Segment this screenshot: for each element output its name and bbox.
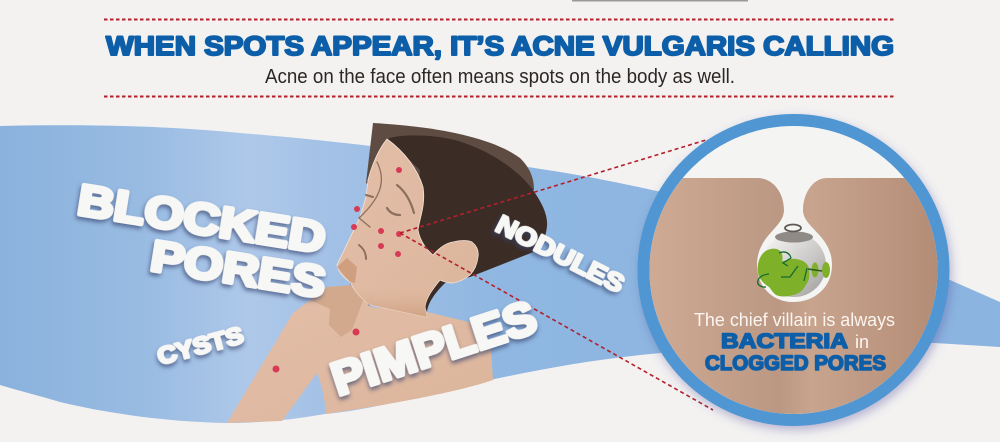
bacterium tail xyxy=(808,262,830,278)
callout text xyxy=(694,309,895,375)
face and neck xyxy=(337,139,478,317)
circle ring xyxy=(644,120,944,420)
bacteria jar xyxy=(758,224,830,297)
label: pimples: PIMPLES xyxy=(325,291,543,406)
label: nodules: NODULES xyxy=(491,210,629,299)
skin cross-section with pore xyxy=(640,178,950,420)
acne spots xyxy=(272,167,402,372)
bacterium details xyxy=(758,252,807,287)
jar glass xyxy=(762,233,826,297)
top dotted rule xyxy=(104,18,895,20)
collar xyxy=(350,283,372,307)
man illustration xyxy=(227,123,547,423)
hair xyxy=(366,123,547,312)
zoom callout lines xyxy=(400,140,713,410)
callout text: in xyxy=(855,332,869,352)
top edge mark xyxy=(572,0,748,2)
title: WHEN SPOTS APPEAR, IT’S ACNE VULGARIS CALLING xyxy=(106,31,894,61)
lid valve xyxy=(785,224,801,232)
magnified pore circle xyxy=(640,120,950,420)
subtitle: Acne on the face often means spots on the body as well. xyxy=(265,66,735,88)
bacterium xyxy=(758,249,809,296)
jar lid xyxy=(775,232,813,242)
blue wave band xyxy=(0,125,1000,423)
chin shading xyxy=(337,258,357,283)
callout text: CLOGGED PORES xyxy=(705,352,886,375)
body and arm xyxy=(227,285,493,423)
callout text: BACTERIA xyxy=(721,330,848,353)
label: blocked: BLOCKED xyxy=(74,175,329,263)
label: pores: PORES xyxy=(147,231,329,307)
label: cysts: CYSTS xyxy=(155,322,247,371)
face lines xyxy=(359,162,414,259)
neck shading xyxy=(350,280,440,317)
callout text: The chief villain is always xyxy=(694,309,895,330)
shoulder shadow xyxy=(310,285,364,337)
bottom dotted rule xyxy=(104,96,895,98)
